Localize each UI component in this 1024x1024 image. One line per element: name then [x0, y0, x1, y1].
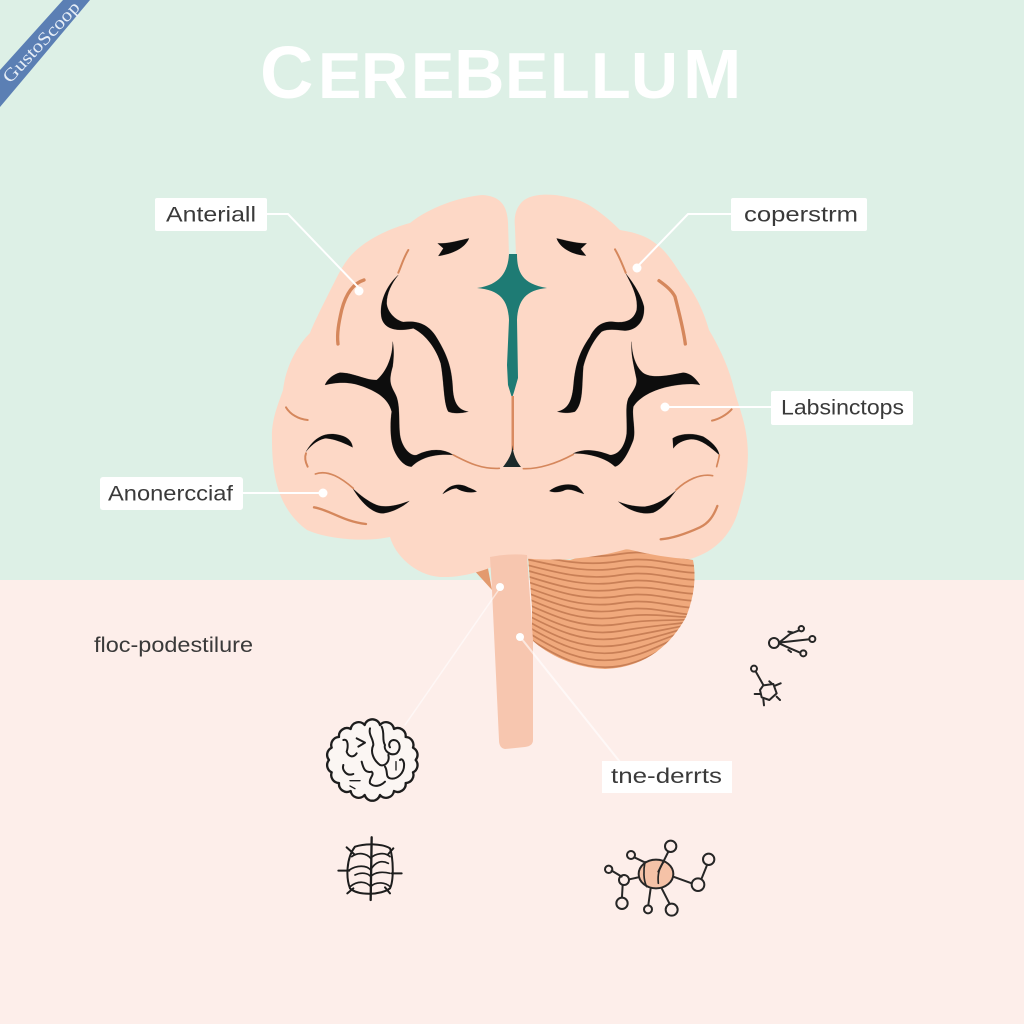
icon: brain outline: [327, 719, 418, 801]
label: Anonerciaf: [100, 477, 243, 510]
label: coperstrm: [731, 198, 867, 231]
icon: neuron network with coloured body: [605, 841, 714, 916]
right hemisphere sulci: [523, 238, 732, 539]
brainstem: [490, 554, 533, 749]
icon: small pentagon neuron: [751, 666, 781, 705]
brain silhouette: [272, 195, 748, 577]
brain: [272, 195, 748, 577]
label: Anonerciaf: Anonercciaf: [108, 482, 233, 506]
central sulcus teal star: [477, 254, 547, 398]
icon: small branching neuron: [769, 626, 815, 656]
label: Anteriall: Anteriall: [166, 204, 256, 226]
corner ribbon: GustoScoop: [0, 0, 84, 87]
background: lower blush panel: [0, 580, 1024, 1024]
cerebellum with folia stripes: [528, 549, 694, 669]
leader lines and anchor dots: [240, 214, 775, 762]
label: floc-podestilure: floc-podestilure: [94, 634, 253, 657]
corner ribbon: [0, 0, 90, 107]
title: B: [454, 35, 505, 113]
label: tne-derrts: [602, 761, 732, 793]
background: upper mint panel: [0, 0, 1024, 580]
midline dark base: [503, 445, 521, 467]
label: Labsinctops: [771, 391, 913, 425]
label: tne-derrts: tne-derrts: [611, 765, 722, 788]
label: coperstrm: coperstrm: [744, 204, 858, 226]
left hemisphere sulci: [286, 238, 499, 524]
small cerebellum wedge left of stem: [472, 563, 492, 590]
title: ERE: [318, 39, 454, 112]
title: ELLU: [505, 39, 678, 112]
midline orange line: [512, 396, 514, 450]
title: C: [260, 31, 313, 114]
title: M: [683, 35, 741, 113]
label: Labsinctops: Labsinctops: [781, 396, 904, 420]
icon: cerebellum line sketch: [338, 837, 402, 900]
label: Anteriall: [155, 198, 267, 231]
